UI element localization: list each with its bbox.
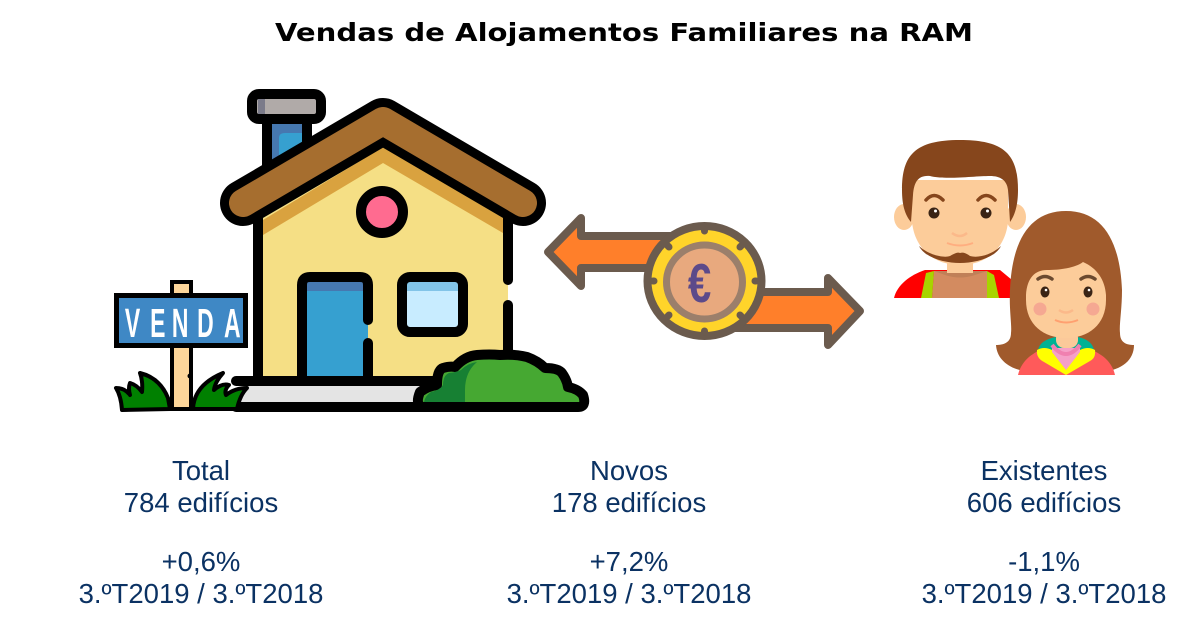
text block: novos: 178 edifícios (552, 487, 706, 518)
text block: novos (507, 455, 751, 609)
woman face (1026, 262, 1106, 338)
text block: existentes: 3.ºT2019 / 3.ºT2018 (922, 578, 1166, 609)
man torso (894, 270, 1012, 298)
text block: total (79, 455, 323, 609)
grass tufts (116, 373, 247, 410)
title: Vendas de Alojamentos Familiares na RAM (275, 18, 973, 47)
woman features (1034, 276, 1100, 322)
icon: man (894, 140, 1026, 298)
icon: euro coin (648, 226, 762, 336)
man eyes and brows (926, 196, 995, 246)
man hair (902, 140, 1018, 222)
for-sale sign post (172, 282, 192, 409)
bush (418, 354, 584, 407)
man ears (894, 204, 914, 230)
text block: existentes: 606 edifícios (967, 487, 1121, 518)
icon: euro coin: € (688, 254, 711, 314)
round attic window (361, 191, 403, 233)
man beard (919, 246, 1001, 263)
text block: total: 784 edifícios (124, 487, 278, 518)
man face (912, 180, 1008, 265)
chimney (252, 94, 321, 175)
woman body (1018, 350, 1115, 375)
icon: arrow right (720, 278, 860, 345)
window (402, 277, 463, 332)
icon: house with for-sale sign (116, 94, 584, 410)
woman collar (1037, 330, 1095, 375)
roof (243, 121, 523, 203)
text block: total: 3.ºT2019 / 3.ºT2018 (79, 578, 323, 609)
text block: existentes: -1,1% (1008, 546, 1080, 577)
text block: novos: Novos (590, 455, 668, 486)
text block: total: Total (172, 455, 230, 486)
doorstep (234, 381, 440, 407)
text block: existentes: Existentes (981, 455, 1107, 486)
woman hair (996, 211, 1134, 372)
text block: novos: +7,2% (590, 546, 668, 577)
sign board: VENDA (125, 301, 241, 347)
text block: novos: 3.ºT2019 / 3.ºT2018 (507, 578, 751, 609)
icon: arrow left (548, 218, 690, 286)
text block: total: +0,6% (162, 546, 240, 577)
house wall (258, 146, 508, 382)
text block: existentes (922, 455, 1166, 609)
icon: woman (996, 211, 1134, 375)
door (302, 277, 368, 382)
